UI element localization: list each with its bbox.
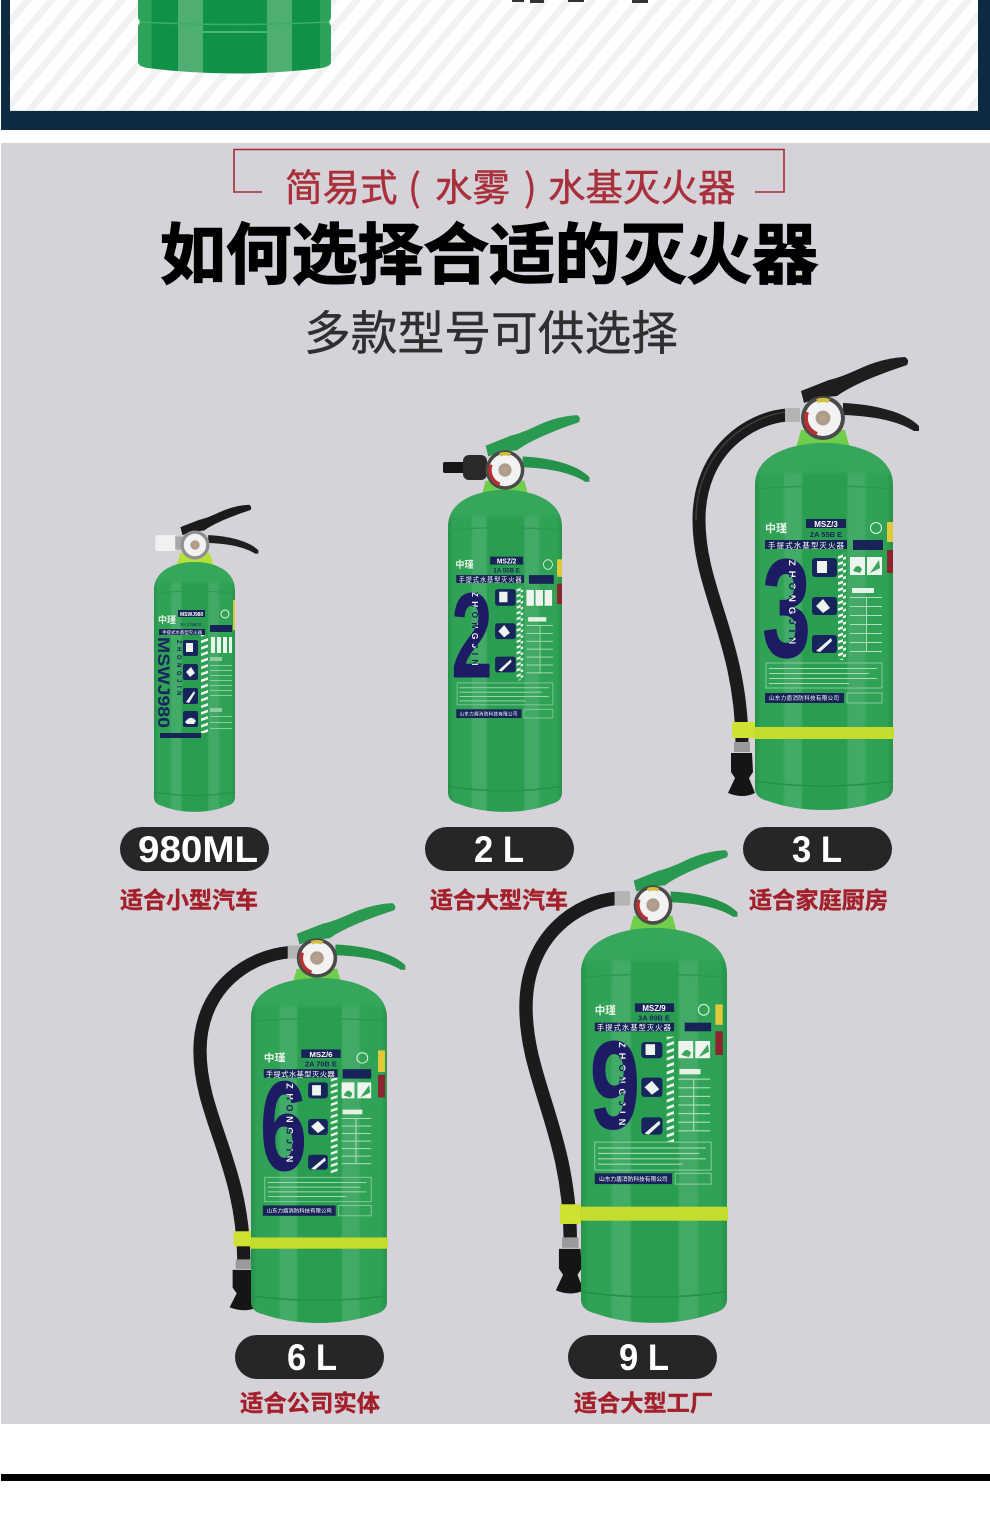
extinguisher: 9L (526, 850, 737, 1323)
pill: 2 L: 2 L (474, 829, 524, 870)
label: 2L: 中瑾 (455, 557, 474, 571)
caption: 适合大型工厂: 适合大型工厂 (574, 1384, 713, 1418)
label: 980ML: ZHONGJIN (175, 640, 181, 699)
caption: 适合小型汽车: 适合小型汽车 (120, 881, 258, 915)
label: 6L: MSZ/6 (309, 1050, 333, 1059)
heading: product type: ) (524, 157, 537, 212)
label: 6L: 6 (260, 1055, 307, 1198)
valve: 980ML (155, 505, 258, 565)
label: 2L: 山东力盾消防科技有限公司 (460, 710, 518, 717)
top panel: cropped green extinguisher base (138, 0, 331, 74)
label: 2L (451, 557, 562, 718)
label: 2L: 2 (451, 569, 493, 704)
label: 9L: ZHONGJIN (617, 1042, 627, 1131)
label: 3L: ZHONGJIN (786, 560, 797, 649)
label: 3L: ZHONGJIN (786, 560, 797, 649)
label: 2L: ZHONGJIN (470, 592, 479, 670)
label: 3L (762, 519, 893, 703)
valve: 2L (481, 415, 589, 497)
valve: 6L (292, 903, 405, 985)
label: 3L: 手提式水基型灭火器 (768, 540, 844, 551)
pill: 980ML: 980ML (138, 829, 258, 870)
retaining band: 9L (580, 1207, 728, 1221)
label: 980ML: MSWJ980 (154, 637, 173, 728)
label: 3L: 中瑾 (765, 520, 787, 536)
body: 3L (754, 443, 894, 810)
heading bracket (234, 150, 784, 192)
label: 9L: 中瑾 (595, 1003, 616, 1018)
caption: 适合家庭厨房: 适合家庭厨房 (749, 881, 888, 915)
label: 3L: MSZ/3 (814, 520, 838, 529)
caption: 适合公司实体: 适合公司实体 (240, 1384, 380, 1418)
pill: 3 L: 3 L (792, 829, 842, 870)
hose: 9L (526, 891, 630, 1293)
retaining band: 6L (250, 1237, 388, 1249)
pill: 9 L (568, 1335, 717, 1379)
hose stub: 2L (443, 455, 487, 480)
label: 3L: 山东力盾消防科技有限公司 (769, 694, 839, 702)
heading: product type: 水基灭火器 (548, 157, 736, 212)
pill: 6 L: 6 L (287, 1337, 337, 1378)
label: 9L: MSZ/9 (642, 1004, 666, 1013)
label: 3L: 2A 55B E (810, 530, 842, 539)
heading: product type: 水雾 (435, 157, 510, 212)
heading: product type: ( (408, 157, 421, 212)
pill: 2 L (425, 827, 574, 871)
pill: 9 L: 9 L (619, 1337, 669, 1378)
label: 6L: 中瑾 (264, 1051, 286, 1066)
valve: 3L (796, 357, 919, 448)
hose: 3L (696, 408, 800, 796)
label: 2L: 1A 55B E (493, 567, 520, 574)
label: 6L: 山东力盾消防科技有限公司 (267, 1207, 332, 1214)
extinguisher: 3L (696, 357, 919, 810)
label: 6L (260, 1049, 385, 1216)
label: 6L: 2A 70B E (305, 1060, 337, 1068)
title: 如何选择合适的灭火器 (160, 202, 818, 298)
label: 9L: 9 (589, 1016, 640, 1156)
label: 3L: 3 (762, 529, 811, 687)
label: 9L: 手提式水基型灭火器 (597, 1022, 671, 1033)
extinguisher: 2L (443, 415, 589, 812)
label: 980ML: 3A 176B E (180, 622, 201, 627)
label: 980ML: 手提式水基型灭火器 (162, 629, 202, 636)
label: 980ML (154, 600, 235, 738)
pill: 3 L (743, 827, 892, 871)
label: 2L: MSZ/2 (497, 559, 517, 566)
extinguisher: 6L (200, 903, 405, 1323)
label: 6L: ZHONGJIN (284, 1083, 295, 1167)
label: 6L: 手提式水基型灭火器 (266, 1070, 335, 1080)
valve: 9L (629, 850, 737, 932)
hose: 6L (200, 946, 303, 1310)
body: 980ML (154, 562, 235, 812)
top panel: navy frame (1, 0, 990, 130)
bottom black rule (1, 1474, 990, 1481)
label: 2L: ZHONGJIN (470, 592, 479, 670)
pill: 6 L (235, 1335, 384, 1379)
subtitle: 多款型号可供选择 (304, 295, 678, 364)
label: 980ML: 中瑾 (158, 613, 176, 626)
heading: product type: 简易式 (285, 157, 398, 212)
label: 9L: 山东力盾消防科技有限公司 (599, 1174, 668, 1183)
body: 2L (448, 490, 562, 812)
label: 9L: 3A 89B E (638, 1013, 670, 1023)
label: 980ML: MSWJ980 (180, 612, 204, 618)
label: 9L: ZHONGJIN (617, 1042, 627, 1131)
label: 2L: 手提式水基型灭火器 (459, 575, 522, 584)
caption: 适合大型汽车: 适合大型汽车 (430, 881, 568, 915)
label: 6L: ZHONGJIN (284, 1083, 295, 1167)
retaining band: 3L (754, 727, 894, 739)
body: 9L (580, 928, 728, 1323)
extinguisher: 980ML (154, 505, 258, 812)
body: 6L (250, 978, 388, 1323)
label: 9L (589, 1003, 723, 1184)
